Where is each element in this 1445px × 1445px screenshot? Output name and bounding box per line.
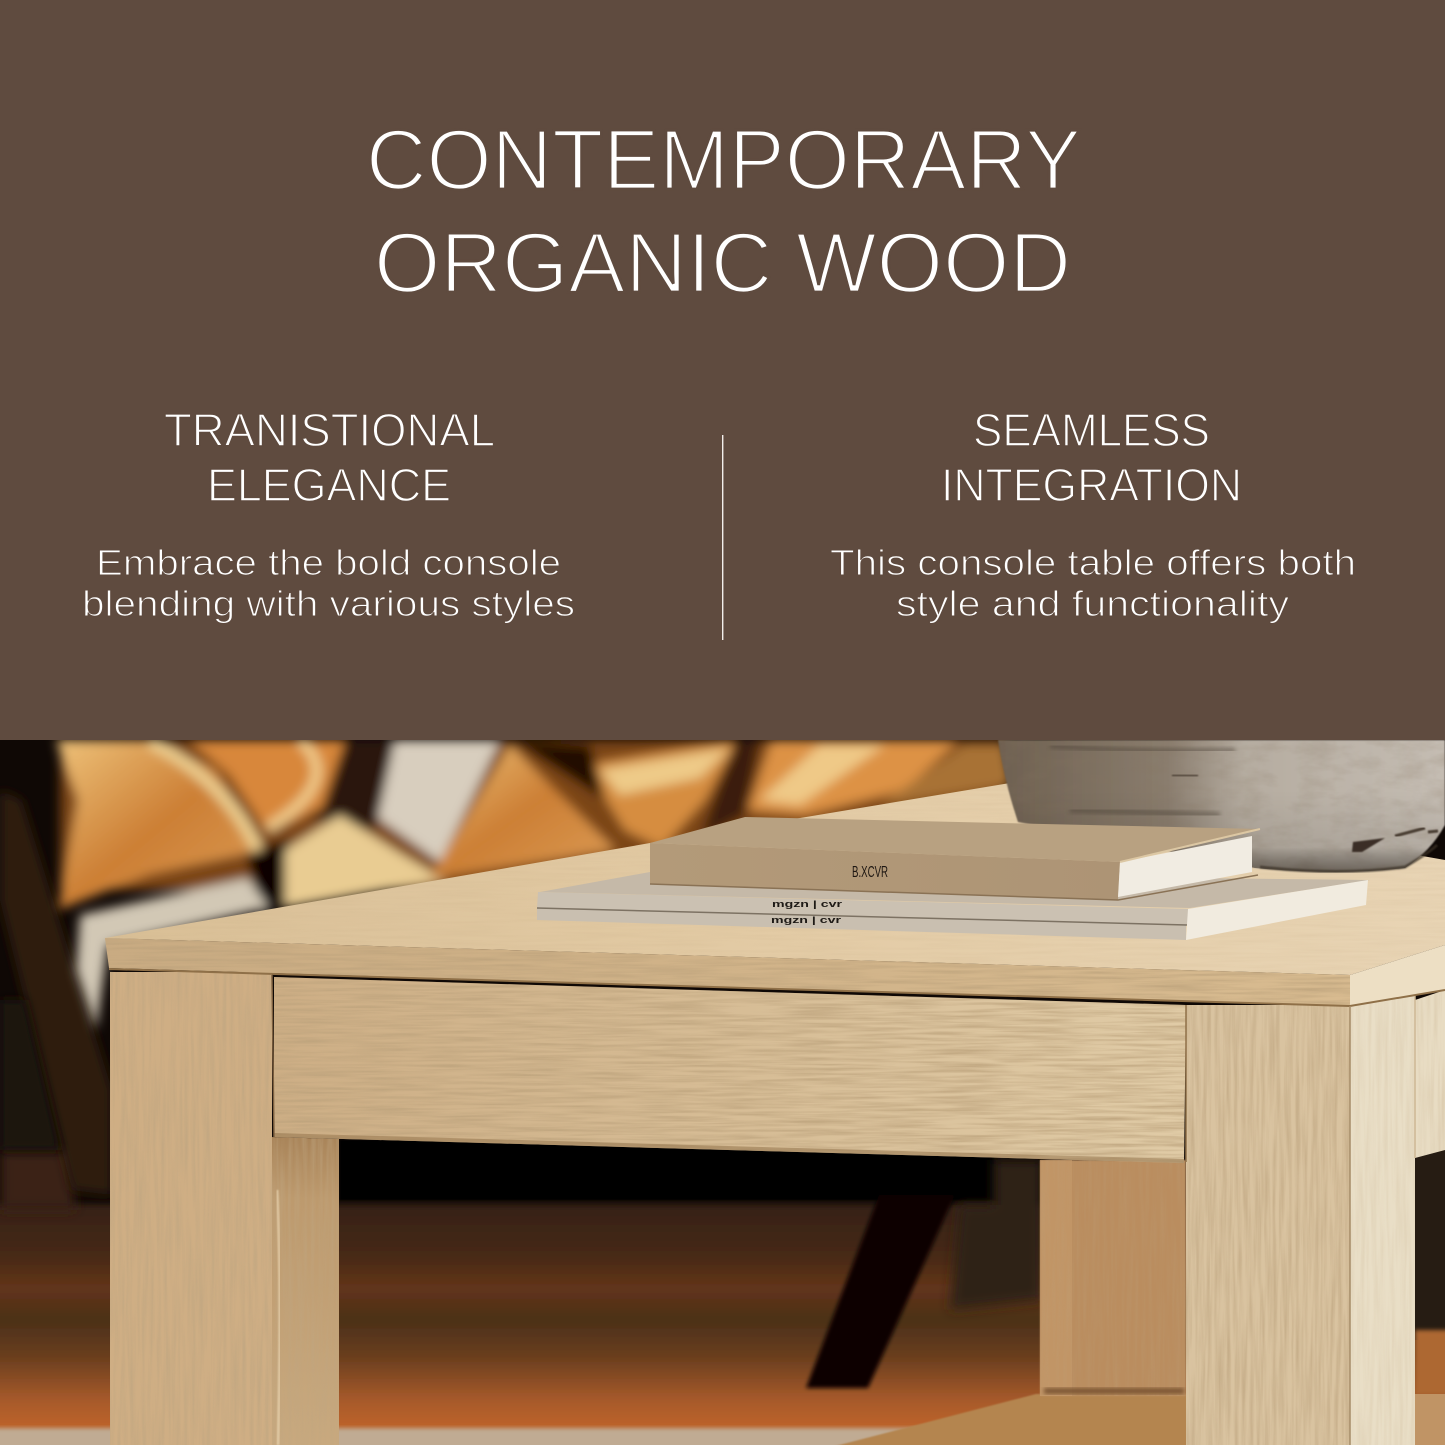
hardcover book [650, 817, 1260, 900]
far back table leg [1040, 1160, 1186, 1396]
left front leg [110, 972, 272, 1445]
right side apron [1415, 990, 1445, 1158]
right heading: SEAMLESS [973, 404, 1210, 456]
vase [998, 740, 1445, 872]
hardcover book: B.XCVR [852, 864, 888, 881]
rug [0, 1425, 913, 1445]
center divider [722, 435, 723, 640]
table top surface [105, 783, 1445, 975]
magazines stack [537, 872, 1370, 940]
right description: This console table offers both [830, 542, 1356, 583]
table apron [274, 977, 1186, 1163]
right description [830, 542, 1356, 624]
right heading: INTEGRATION [941, 459, 1242, 511]
right feature: seamless integration [830, 404, 1356, 624]
left heading: ELEGANCE [207, 459, 451, 511]
right front leg side face [1350, 994, 1415, 1445]
brown header panel [0, 0, 1445, 740]
product photo: wooden console table [0, 740, 1445, 1445]
right front leg [1186, 1005, 1350, 1445]
dark chair leg [806, 1195, 955, 1388]
right heading [941, 404, 1242, 511]
stacked firewood logs [56, 740, 1012, 1030]
title: CONTEMPORARY [366, 113, 1081, 208]
title: ORGANIC WOOD [374, 216, 1071, 311]
left feature: transitional elegance [82, 404, 575, 624]
title [366, 113, 1081, 311]
table top front edge [105, 938, 1445, 1445]
magazines stack: mgzn | cvr [771, 915, 842, 925]
left description: Embrace the bold console [96, 542, 561, 583]
left description: blending with various styles [82, 583, 575, 624]
left description [82, 542, 575, 624]
left leg inner side [270, 1137, 339, 1445]
blurred room background [0, 740, 1445, 1445]
left heading [164, 404, 495, 511]
right description: style and functionality [896, 583, 1289, 624]
left heading: TRANISTIONAL [164, 404, 495, 456]
magazines stack: mgzn | cvr [772, 899, 843, 909]
